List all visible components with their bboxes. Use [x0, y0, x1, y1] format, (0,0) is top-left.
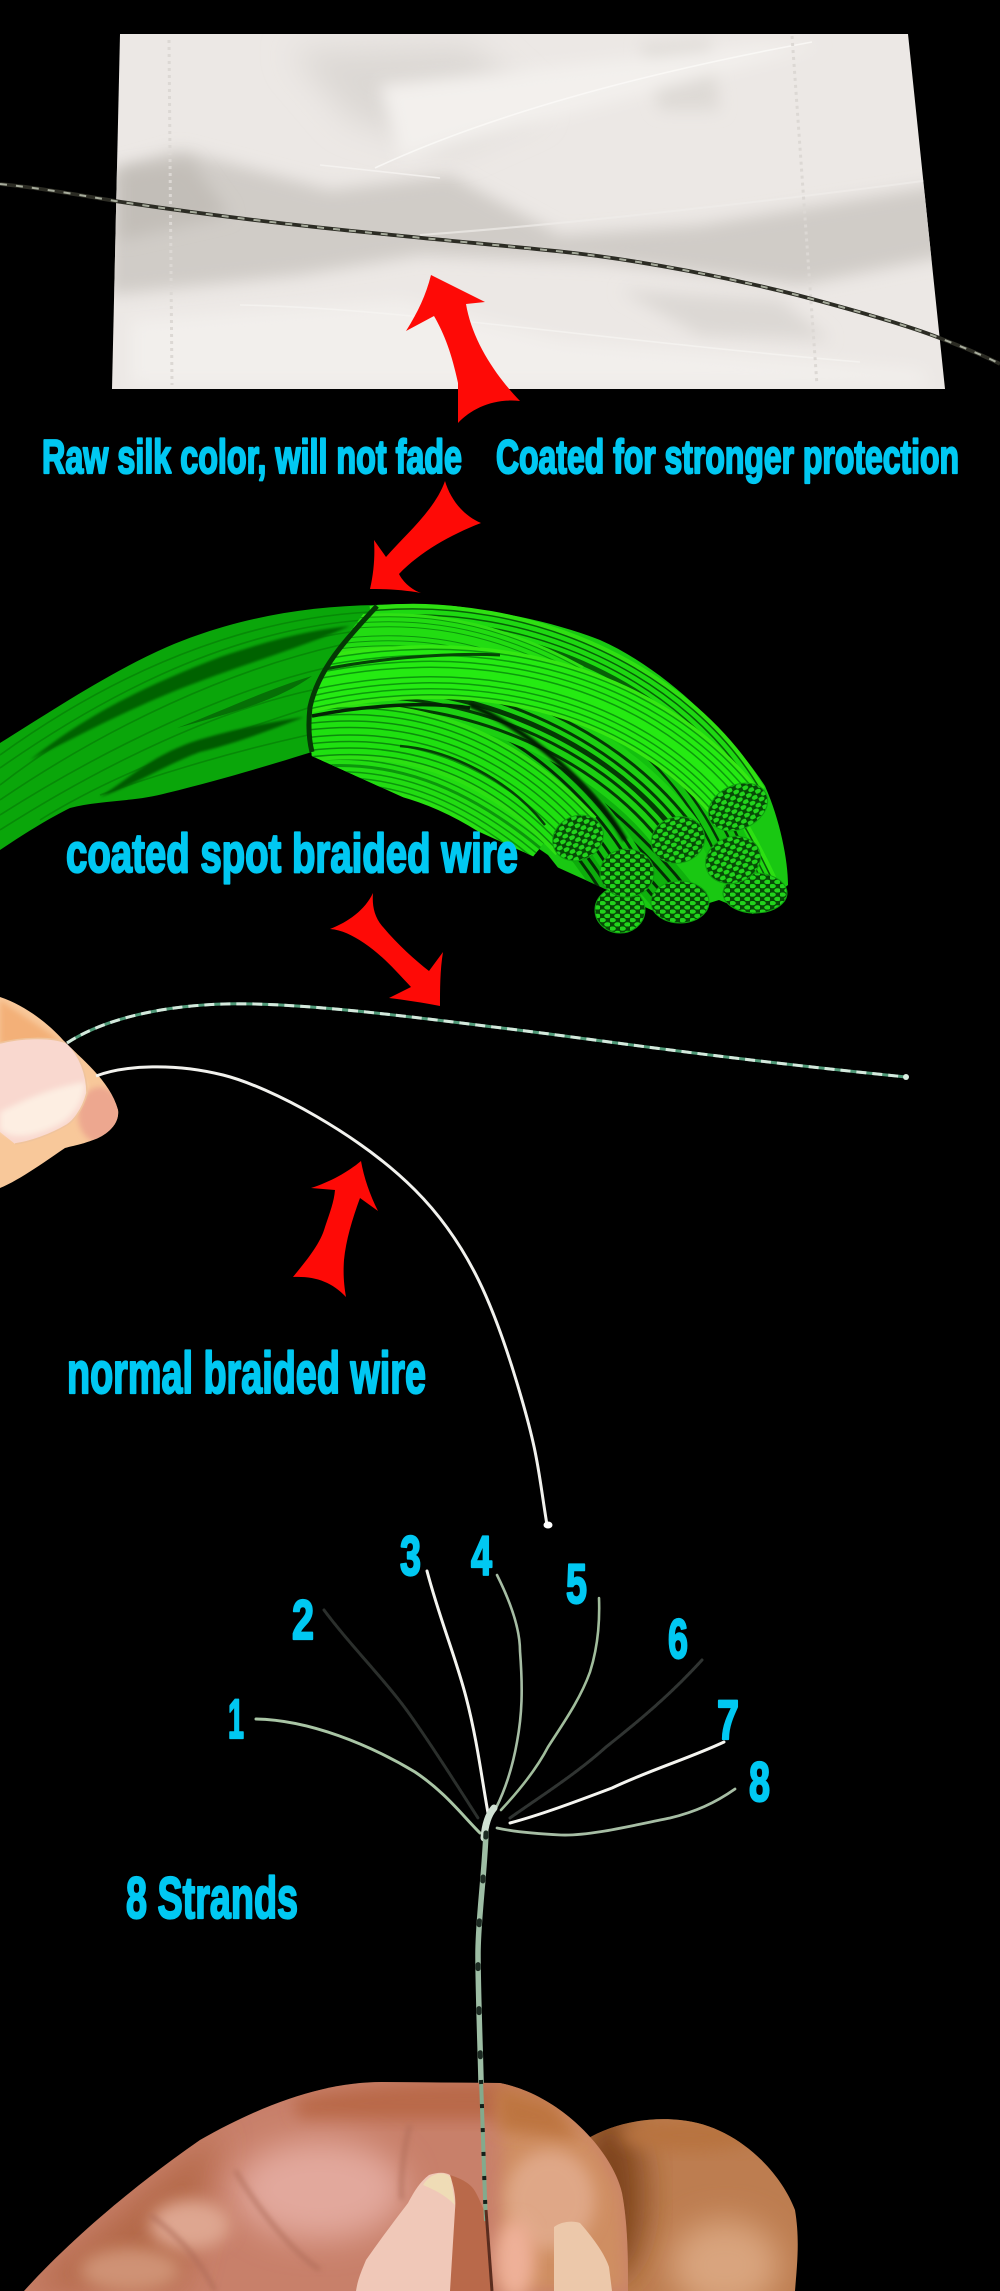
photo: fingertip holding two wires	[0, 997, 122, 1188]
line entering fingers	[481, 2080, 486, 2221]
left bundle darker section	[0, 605, 377, 850]
strand numbers: 4	[471, 1524, 492, 1587]
hub	[484, 1808, 494, 1838]
right bundle strands	[311, 604, 788, 914]
strand numbers: 8	[749, 1750, 770, 1813]
strand 3	[427, 1571, 488, 1813]
back finger	[590, 2119, 798, 2291]
text: normal braided wire: normal braided wire	[67, 1341, 426, 1406]
right bundle base	[340, 604, 788, 914]
strand 7	[510, 1742, 724, 1823]
left bundle shadow gaps	[30, 626, 350, 760]
separated strands diagram	[256, 1571, 735, 2221]
second nail	[554, 2222, 612, 2291]
text: raw silk color: Raw silk color, will not fade	[42, 430, 462, 483]
main finger	[20, 2080, 640, 2291]
thumbnail	[356, 2173, 455, 2291]
photo: hand holding braided line	[20, 2080, 805, 2291]
shadow gap	[486, 2210, 492, 2291]
dark separations	[320, 654, 500, 670]
strand numbers: 2	[292, 1588, 314, 1651]
strand numbers: 1	[228, 1687, 244, 1750]
strand numbers: 5	[566, 1552, 587, 1615]
strand 5	[501, 1598, 599, 1810]
strand numbers	[228, 1524, 770, 1813]
illustration: green coated fibre bundle	[0, 604, 788, 931]
strand numbers: 7	[717, 1688, 739, 1751]
strand 1	[256, 1719, 480, 1833]
strand 8	[497, 1789, 735, 1835]
red arrow: to green bundle	[370, 481, 481, 593]
strand numbers: 3	[400, 1524, 421, 1587]
photo: white paper sheet	[100, 30, 960, 395]
strand 4	[496, 1575, 522, 1808]
normal white wire sample	[96, 1067, 547, 1525]
strand numbers: 6	[668, 1607, 688, 1670]
braided stem	[478, 1833, 486, 2221]
strand 2	[324, 1610, 478, 1818]
red arrow: to coated wire	[330, 893, 443, 1006]
black band around bundle	[309, 606, 377, 752]
text: 8 strands: 8 Strands	[126, 1866, 298, 1931]
red arrow: to paper	[406, 275, 520, 423]
red arrow: to normal wire	[293, 1161, 378, 1297]
cut strand ends	[545, 774, 787, 933]
text: coated spot braided wire: coated spot braided wire	[66, 822, 518, 884]
coated wire sample	[67, 1004, 909, 1080]
nail tip	[423, 2174, 455, 2205]
thumb strip	[450, 2175, 492, 2291]
white wire tip	[544, 1522, 552, 1528]
wire over paper	[0, 184, 1000, 364]
strand 6	[510, 1660, 702, 1818]
